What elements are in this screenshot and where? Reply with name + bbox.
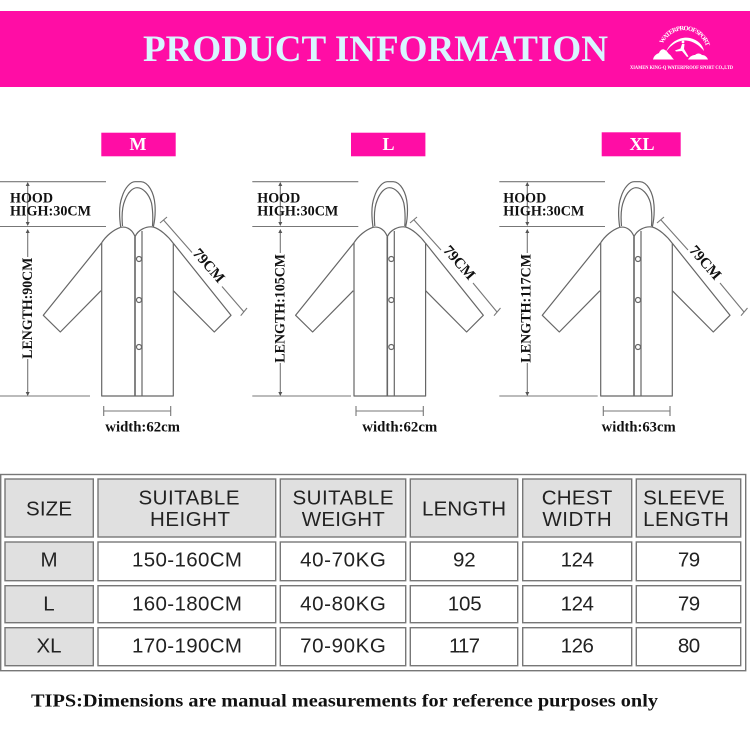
length dimension XL — [499, 229, 598, 396]
size badge XL: XL — [629, 134, 655, 154]
table row L: 40-80KG — [300, 593, 386, 616]
length dimension M — [0, 229, 90, 396]
hood height dimension M — [0, 182, 106, 226]
width dimension L: width:62cm — [362, 420, 437, 436]
hood height dimension XL — [499, 182, 605, 226]
table header row: HEIGHT — [150, 508, 230, 531]
table row M: 150-160CM — [132, 549, 242, 572]
sleeve dimension M: 79CM — [189, 246, 227, 286]
table header row: SIZE — [26, 498, 72, 521]
table row M: 124 — [561, 549, 594, 572]
size badge L — [351, 133, 425, 156]
hood height dimension L: HIGH:30CM — [257, 203, 338, 219]
table header row: SUITABLE — [138, 486, 240, 509]
hood height dimension XL: HIGH:30CM — [503, 203, 584, 219]
table header row: WIDTH — [542, 508, 612, 531]
table row M: 92 — [453, 549, 476, 572]
raincoat outline M — [43, 182, 231, 396]
title: PRODUCT INFORMATION — [143, 29, 608, 70]
table row M — [5, 542, 741, 581]
panel: size XL diagram — [499, 132, 748, 436]
table row M: 79 — [678, 549, 700, 572]
table header row: LENGTH — [643, 508, 729, 531]
width dimension XL: width:63cm — [602, 420, 676, 436]
sleeve dimension M — [160, 217, 247, 316]
table row XL — [5, 628, 741, 666]
size table — [1, 474, 746, 671]
sleeve dimension L: 79CM — [440, 243, 478, 283]
size badge M — [101, 133, 176, 156]
brand logo — [630, 26, 733, 71]
raincoat outline XL — [542, 182, 730, 396]
table row XL: 70-90KG — [300, 635, 386, 658]
width dimension XL — [602, 406, 676, 436]
table row XL: 170-190CM — [132, 635, 242, 658]
size badge XL — [602, 132, 681, 156]
table row XL: 80 — [678, 635, 700, 658]
sleeve dimension XL — [657, 217, 748, 316]
length dimension XL: LENGTH:117CM — [519, 254, 535, 363]
table row XL: 117 — [449, 635, 480, 658]
table row XL: 126 — [561, 635, 594, 658]
table row L — [5, 586, 741, 623]
panel: size M diagram — [0, 133, 247, 436]
width dimension L — [356, 406, 437, 436]
table header row: CHEST — [542, 486, 613, 509]
tips note: TIPS:Dimensions are manual measurements for reference purposes only — [31, 690, 658, 710]
table row L: 160-180CM — [132, 593, 242, 616]
raincoat outline L — [296, 182, 483, 396]
sleeve dimension L — [410, 217, 500, 316]
length dimension L — [252, 229, 351, 396]
table row L: 105 — [448, 593, 482, 616]
table row L: L — [43, 593, 55, 616]
table header row: LENGTH — [422, 498, 506, 521]
hood height dimension L: HOOD — [257, 191, 300, 207]
hood height dimension M: HOOD — [10, 191, 53, 207]
sleeve dimension XL: 79CM — [686, 243, 724, 283]
length dimension L: LENGTH:105CM — [272, 254, 288, 363]
table row M: 40-70KG — [300, 549, 386, 572]
width dimension M: width:62cm — [105, 420, 180, 436]
table row L: 79 — [678, 593, 700, 616]
hood height dimension M: HIGH:30CM — [10, 203, 91, 219]
hood height dimension XL: HOOD — [503, 191, 546, 207]
table row L: 124 — [561, 593, 594, 616]
table row XL: XL — [36, 635, 62, 658]
table header row: SLEEVE — [643, 486, 725, 509]
header banner — [0, 11, 750, 87]
length dimension M: LENGTH:90CM — [20, 258, 36, 359]
table header row: WEIGHT — [302, 508, 385, 531]
table header row: SUITABLE — [292, 486, 394, 509]
size badge M: M — [130, 134, 146, 154]
table row M: M — [40, 549, 58, 572]
width dimension M — [104, 406, 180, 436]
panel: size L diagram — [252, 133, 500, 436]
hood height dimension L — [252, 182, 358, 226]
brand logo: WATERPROOF SPORT — [659, 26, 710, 46]
table header row — [5, 479, 741, 537]
size badge L: L — [382, 134, 395, 154]
